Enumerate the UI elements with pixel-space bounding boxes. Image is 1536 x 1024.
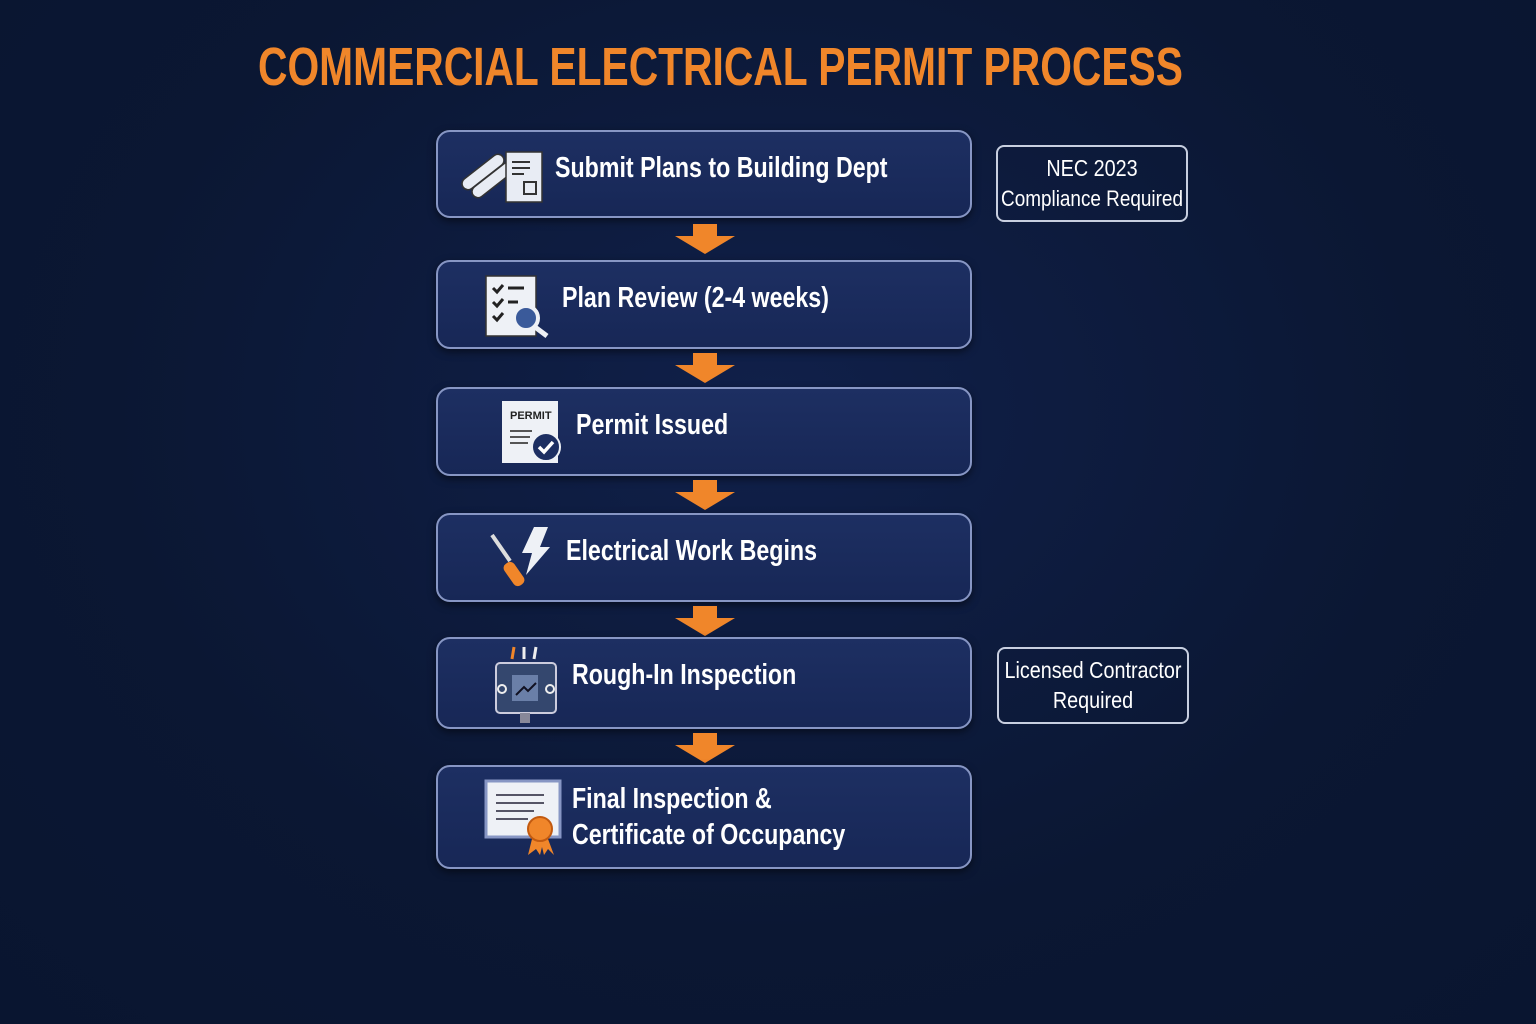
arrow 5 <box>675 733 735 763</box>
label: Plan Review (2-4 weeks) <box>562 282 829 314</box>
icon: screwdriver bolt <box>490 527 550 586</box>
label: Rough-In Inspection <box>572 659 796 691</box>
label: Certificate of Occupancy <box>572 819 845 851</box>
icon: plans <box>461 151 543 203</box>
title: COMMERCIAL ELECTRICAL PERMIT PROCESS <box>258 37 1183 97</box>
label <box>572 783 846 851</box>
arrow 1 <box>675 224 735 254</box>
icon: permit: PERMIT <box>510 410 552 422</box>
step 2: plan review <box>436 260 972 349</box>
step 4: electrical work <box>436 513 972 602</box>
side note: licensed contractor: Licensed Contractor <box>1004 657 1182 683</box>
label: Final Inspection & <box>572 783 772 815</box>
step 5: rough-in <box>436 637 972 729</box>
icon: checklist magnifier <box>485 275 548 338</box>
arrow 2 <box>675 353 735 383</box>
side note: licensed contractor <box>997 647 1189 724</box>
side note: NEC: NEC 2023 <box>1046 155 1138 181</box>
arrow 4 <box>675 606 735 636</box>
icon: certificate <box>484 780 562 855</box>
icon: panel <box>495 646 557 723</box>
side note: NEC <box>996 145 1188 222</box>
step 6: final inspection <box>436 765 972 869</box>
label: Permit Issued <box>576 409 728 441</box>
label: Submit Plans to Building Dept <box>555 152 888 184</box>
step 1: submit plans <box>436 130 972 218</box>
label: Electrical Work Begins <box>566 535 817 567</box>
side note: licensed contractor: Required <box>1053 687 1133 713</box>
arrow 3 <box>675 480 735 510</box>
side note: NEC: Compliance Required <box>1001 186 1183 211</box>
icon: permit <box>502 401 561 463</box>
step 3: permit issued <box>436 387 972 476</box>
